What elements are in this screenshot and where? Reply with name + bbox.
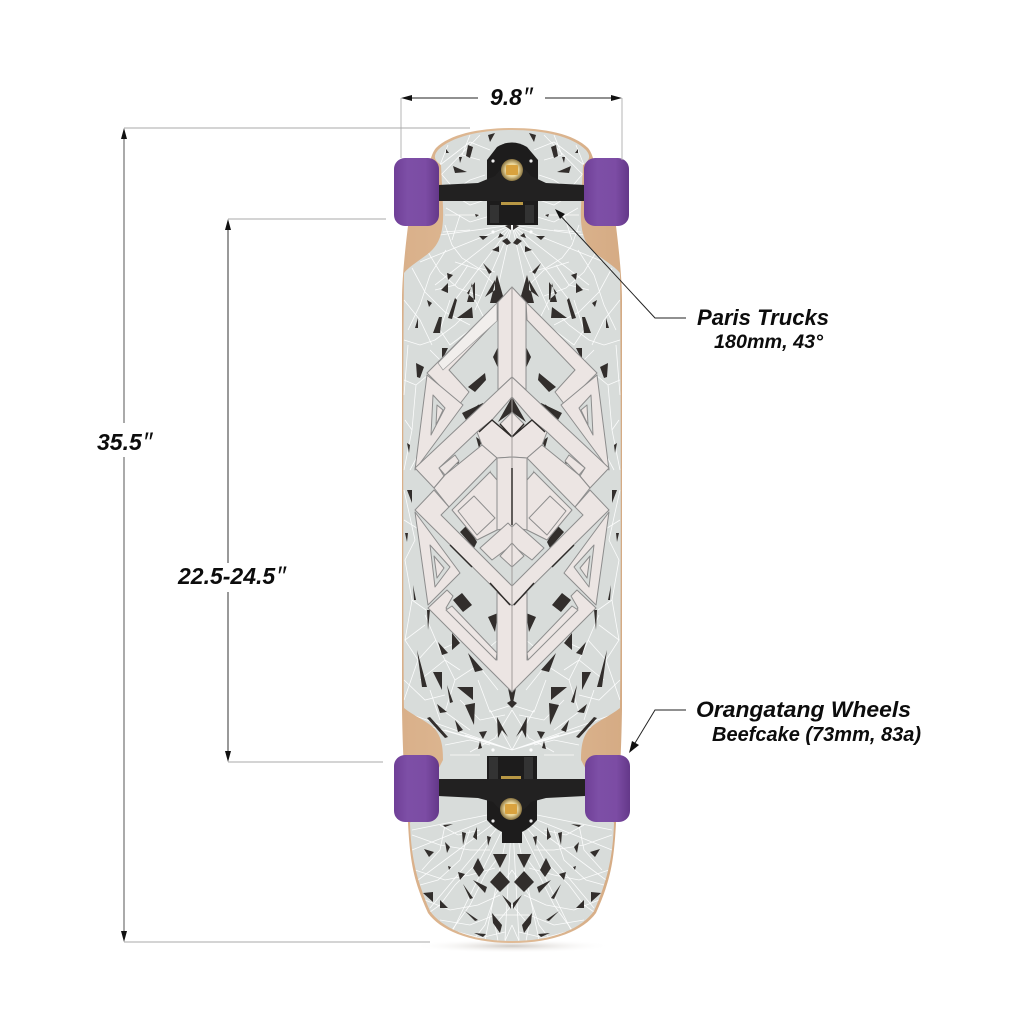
top kingpin: [501, 159, 523, 181]
width label: 9.8: [490, 84, 522, 110]
brand label strip: [438, 303, 497, 370]
wheel: top right: [584, 158, 629, 226]
bottom truck: [438, 748, 585, 843]
wheel: bottom right: [585, 755, 630, 822]
wheelbase label: ″: [276, 561, 287, 591]
bottom hanger: [438, 779, 585, 814]
wheel: bottom left: [394, 755, 439, 822]
top hanger: [438, 164, 585, 201]
wood deck outline: [402, 128, 622, 943]
callout: wheels: [629, 697, 921, 753]
trucks detail: 180mm, 43°: [714, 332, 823, 353]
wheels detail: Beefcake (73mm, 83a): [712, 724, 921, 746]
bottom baseplate: [487, 756, 537, 843]
top truck: [438, 142, 585, 234]
wheelbase label: 22.5-24.5: [178, 563, 275, 589]
wheelbase dimension: [177, 219, 386, 762]
deck graphic: [400, 125, 624, 945]
length label: 35.5: [97, 429, 142, 455]
wheels label: Orangatang Wheels: [696, 697, 911, 722]
bottom upper nut: [501, 776, 521, 779]
callout: trucks: [555, 209, 829, 353]
trucks label: Paris Trucks: [697, 305, 829, 330]
top baseplate: [487, 142, 538, 225]
wheel: top left: [394, 158, 439, 226]
longboard deck: [400, 125, 624, 945]
width dimension: [401, 82, 622, 160]
bottom kingpin: [500, 798, 522, 820]
length dimension: [97, 128, 470, 942]
width label: ″: [523, 82, 534, 112]
central diamond motif: [415, 287, 609, 692]
top lower nut: [501, 202, 523, 205]
length label: ″: [143, 427, 154, 457]
board shadow: [412, 939, 612, 953]
